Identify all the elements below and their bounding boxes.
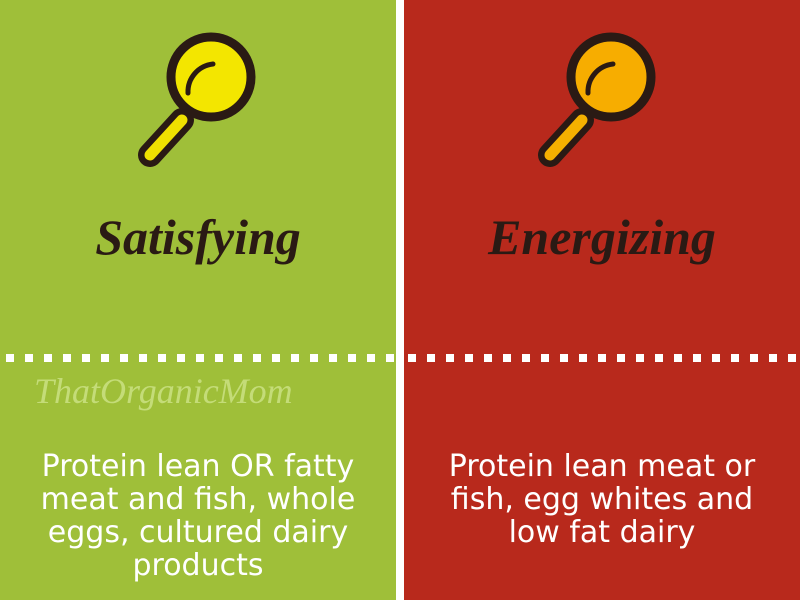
text: satisfying proteins: Protein lean OR fatty bbox=[42, 449, 354, 484]
text: energizing proteins: low fat dairy bbox=[509, 515, 695, 550]
panel: satisfying bbox=[0, 0, 396, 600]
text: satisfying proteins: meat and fish, whole bbox=[41, 482, 355, 517]
text: satisfying proteins bbox=[41, 449, 355, 583]
text: energizing proteins bbox=[449, 449, 756, 550]
title: Satisfying: Satisfying bbox=[95, 209, 301, 265]
watermark: ThatOrganicMom bbox=[34, 371, 293, 411]
text: energizing proteins: Protein lean meat or bbox=[449, 449, 755, 484]
text: energizing proteins: fish, egg whites and bbox=[451, 482, 753, 517]
icon: orange magnifier bbox=[538, 32, 656, 167]
divider dots bbox=[6, 354, 396, 362]
icon: yellow magnifier bbox=[138, 32, 256, 167]
text: satisfying proteins: eggs, cultured dairy bbox=[48, 515, 348, 550]
panel: energizing bbox=[404, 0, 800, 600]
divider dots bbox=[408, 354, 800, 362]
text: satisfying proteins: products bbox=[132, 548, 264, 583]
title: Energizing: Energizing bbox=[488, 209, 716, 265]
